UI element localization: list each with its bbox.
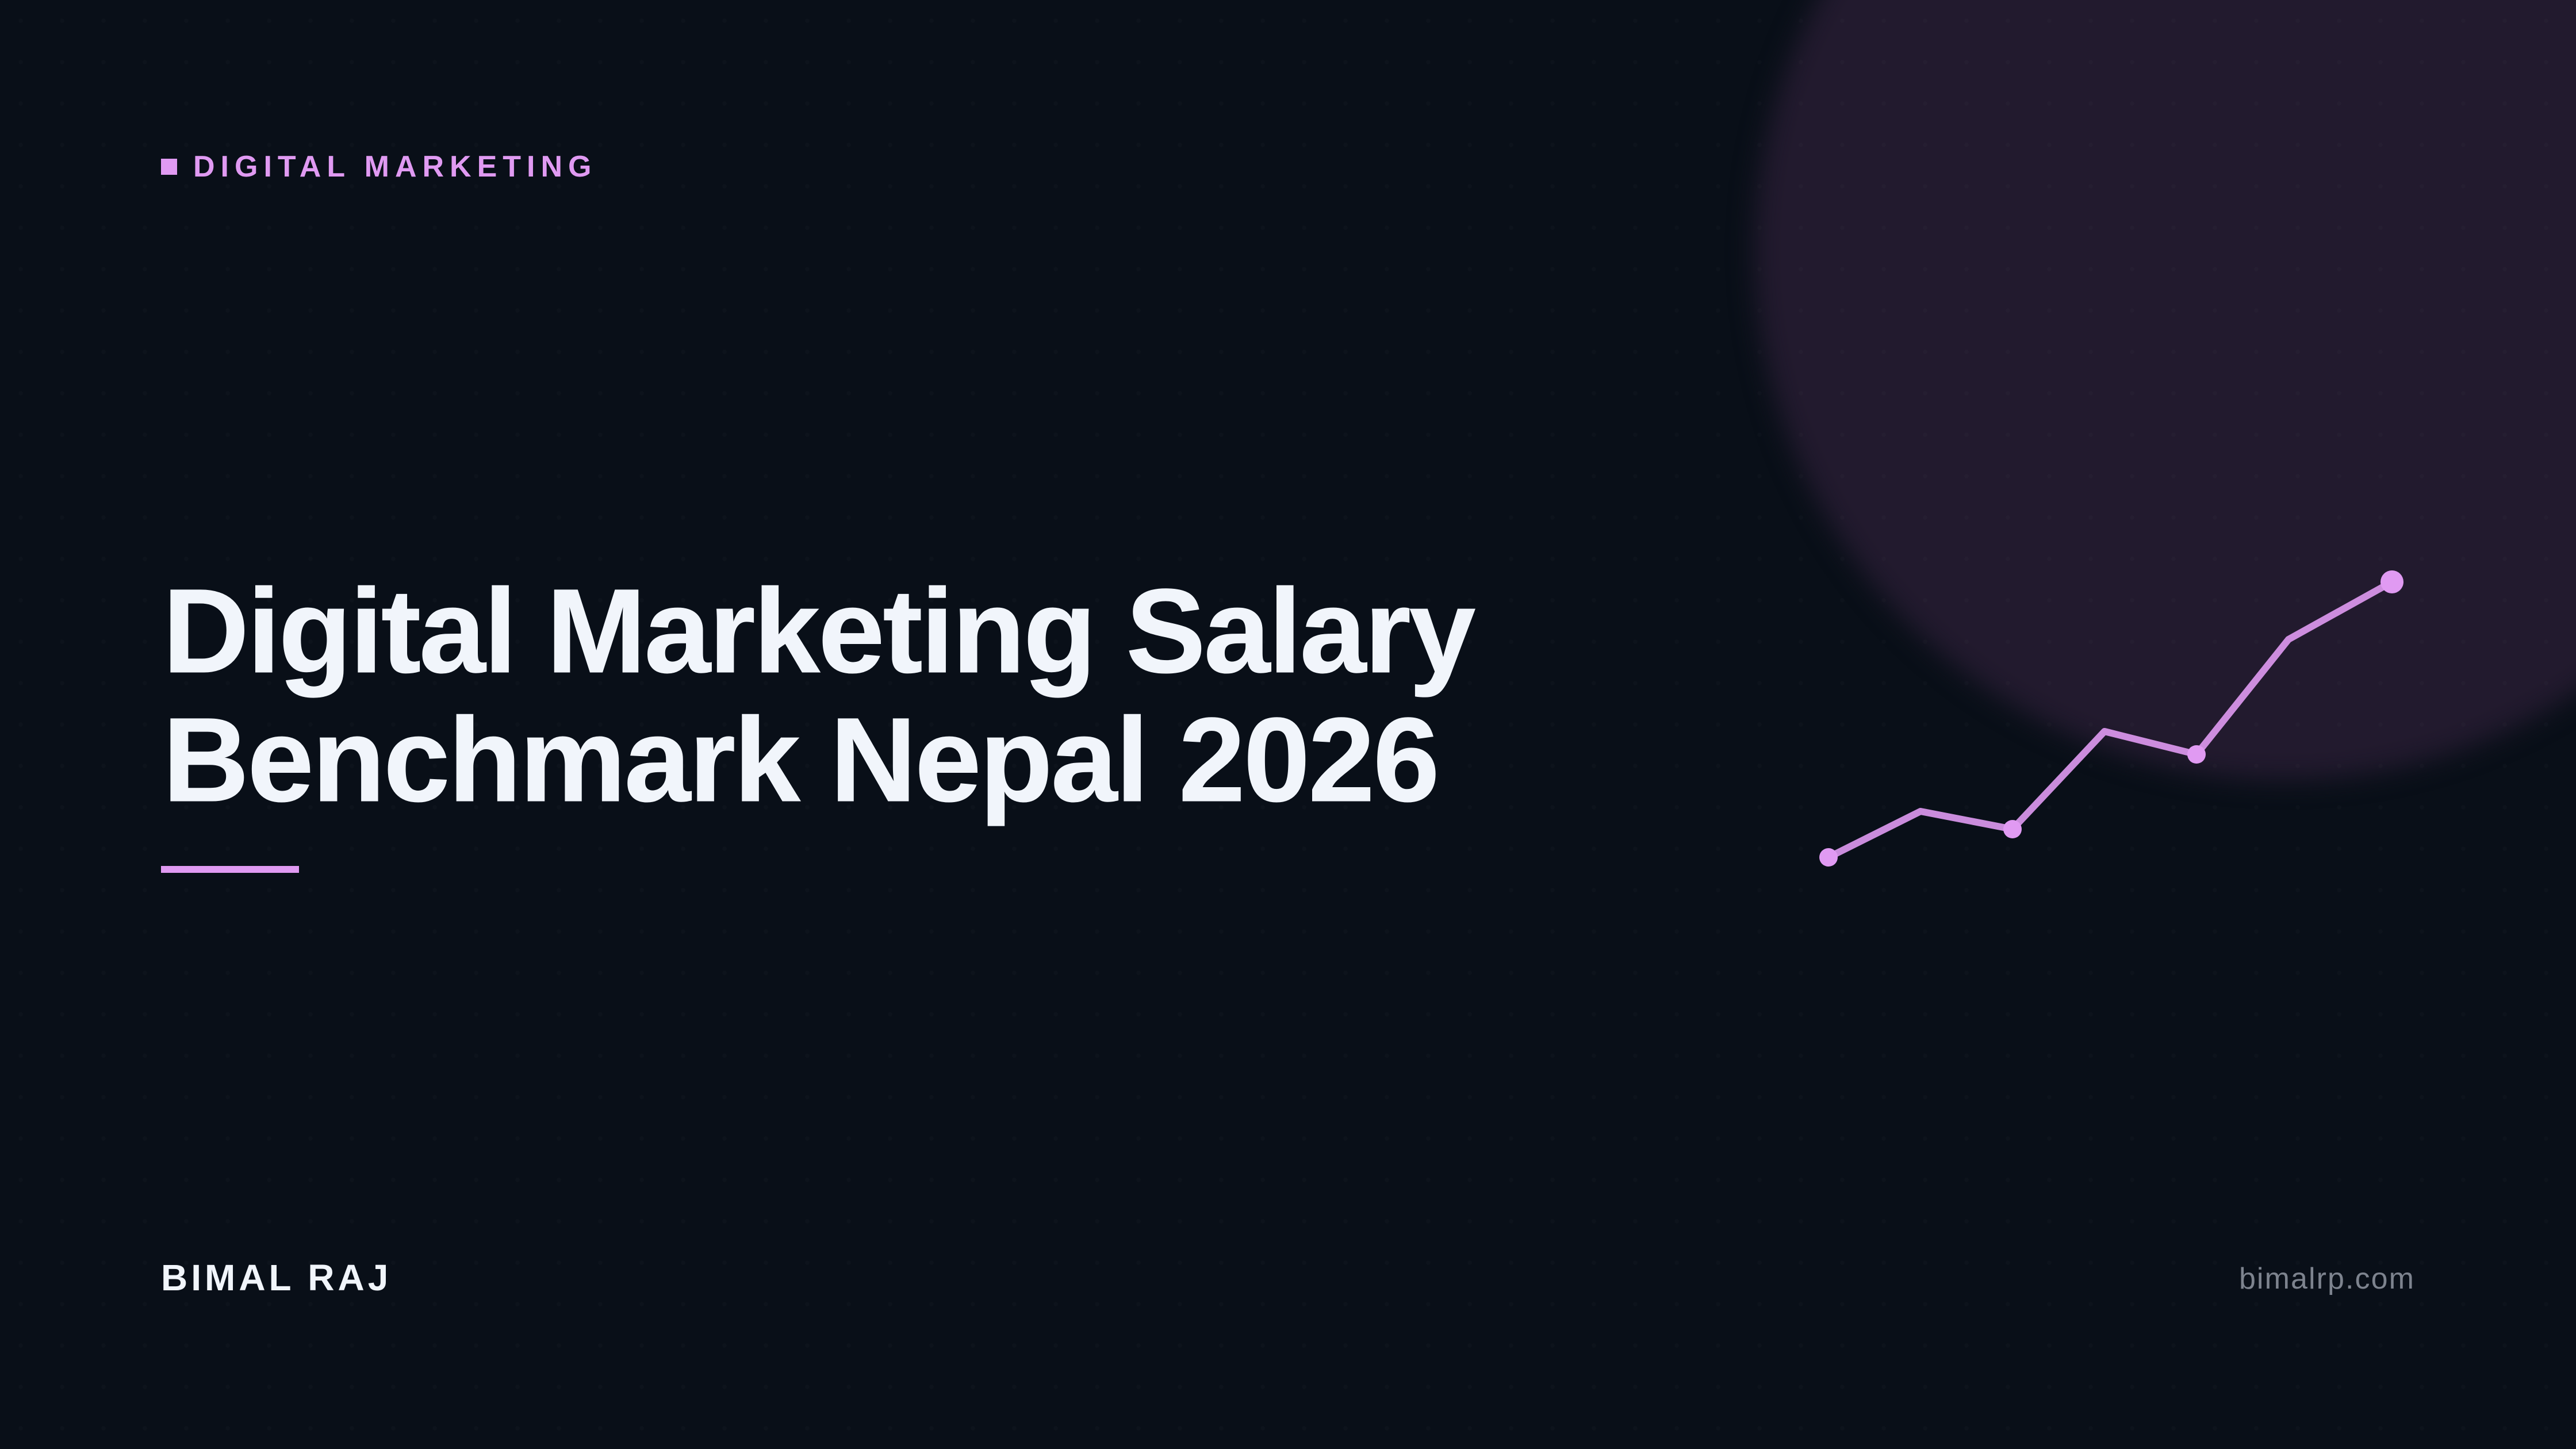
eyebrow label [161, 150, 597, 183]
title: Benchmark Nepal 2026 [163, 693, 1438, 827]
website: bimalrp.com [2239, 1262, 2415, 1295]
trend line [1828, 582, 2392, 857]
eyebrow square icon [161, 159, 177, 175]
decorative blurred circle [1755, 0, 2576, 780]
chart data points [1819, 570, 2404, 867]
title: Digital Marketing Salary [163, 565, 1474, 698]
author name: BIMAL RAJ [161, 1257, 392, 1298]
title [163, 565, 1475, 827]
accent rule under title [161, 866, 299, 873]
eyebrow text: DIGITAL MARKETING [193, 150, 597, 183]
